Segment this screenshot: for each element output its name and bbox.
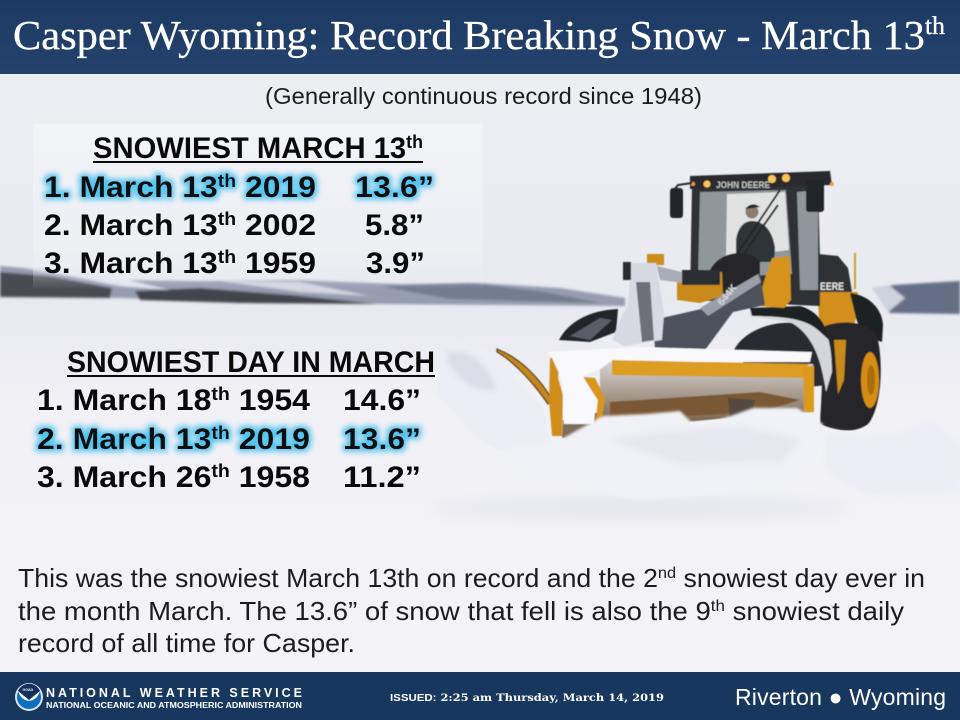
row 1 highlighted [44, 171, 434, 204]
summary paragraph: snowiest daily [725, 596, 904, 626]
summary paragraph: nd [658, 565, 676, 582]
lift arm [653, 273, 765, 350]
office location: Riverton ● Wyoming [735, 684, 946, 710]
row 1 highlighted: 13.6” [355, 171, 434, 204]
summary paragraph: snowiest day ever in [676, 563, 925, 593]
tilt linkage [612, 262, 720, 346]
orange warning lamp [647, 254, 664, 265]
photo: wheel loader with snow plow [438, 171, 960, 500]
snow pile pushed by blade [500, 408, 960, 500]
agency name: NATIONAL OCEANIC AND ATMOSPHERIC ADMINISTRATION [46, 701, 302, 710]
front tire [733, 323, 830, 390]
row 2 highlighted: 2. March 13 [37, 423, 198, 456]
row 3: 3.9” [366, 247, 425, 280]
icon: NOAA logo [15, 683, 43, 711]
cab: glass [698, 190, 792, 278]
heading: th [406, 132, 423, 152]
row 3: 11.2” [343, 461, 421, 494]
rear tire and rim [820, 323, 881, 430]
orange body pieces [757, 256, 791, 308]
snow heap left of blade [438, 343, 590, 470]
subtitle: (Generally continuous record since 1948) [265, 83, 702, 109]
row 3: 3. March 13 [44, 247, 205, 280]
engine body [817, 292, 858, 340]
row 3: 3. March 26 [37, 461, 198, 494]
row 2 highlighted: th [211, 423, 230, 443]
row 2: 2002 [236, 209, 316, 242]
row 2 [44, 209, 424, 242]
agency name: NATIONAL WEATHER SERVICE [46, 686, 302, 700]
row 2 highlighted: 2019 [230, 423, 310, 456]
cab: driver [736, 204, 775, 262]
panel: snowiest day in March [37, 346, 435, 494]
cab: roof with lights [690, 171, 834, 190]
snow on top of blade [548, 347, 812, 424]
lift arm: 644K [716, 282, 740, 308]
row 1: 14.6” [343, 384, 421, 417]
row 1: th [211, 384, 230, 404]
row 1 highlighted: 2019 [236, 171, 316, 204]
snow shadows [430, 445, 960, 514]
summary paragraph: th [711, 598, 725, 615]
row 3: th [211, 461, 230, 481]
panel: snowiest March 13th [33, 124, 483, 290]
decal: DEERE: EERE [820, 281, 844, 293]
hood [818, 254, 852, 294]
summary paragraph: This was the snowiest March 13th on record and the 2 [18, 563, 642, 593]
row 2: th [218, 209, 236, 229]
row 2: 5.8” [365, 209, 424, 242]
row 2: 2. March 13 [44, 209, 205, 242]
front fender [750, 306, 832, 392]
agency name [46, 686, 302, 710]
heap shading [445, 351, 496, 390]
row 1 highlighted: th [218, 171, 236, 191]
title: th [925, 13, 946, 40]
blade [549, 358, 814, 438]
distant mountains right [872, 281, 960, 314]
row 3 [44, 247, 425, 280]
header bar [0, 0, 960, 74]
row 3 [37, 461, 421, 494]
snowy tread on far tire [570, 318, 612, 340]
distant mountains left [0, 266, 625, 306]
row 2 highlighted [37, 423, 421, 456]
issued time: ISSUED: 2:25 am Thursday, March 14, 2019 [390, 693, 664, 704]
heading: SNOWIEST MARCH 13 [93, 132, 409, 165]
row 3: 1958 [230, 461, 310, 494]
footer bar [0, 672, 960, 720]
cab: steering wheel and wipers [710, 253, 760, 290]
cab: roof with lights: JOHN DEERE [716, 180, 770, 190]
summary paragraph: record of all time for Casper. [18, 628, 355, 658]
rear fender [850, 293, 883, 342]
cab: mirrors [670, 180, 824, 218]
heading: SNOWIEST DAY IN MARCH [67, 346, 435, 379]
far tire behind arms [559, 309, 618, 342]
cab: frame [690, 180, 820, 306]
row 3: th [218, 247, 236, 267]
title: Casper Wyoming: Record Breaking Snow - March 13 [13, 12, 895, 58]
row 2 highlighted: 13.6” [343, 423, 421, 456]
row 3: 1959 [236, 247, 316, 280]
row 1: 1954 [230, 384, 311, 417]
summary paragraph: the month March. The 13.6” of snow that fell is also the 9 [18, 596, 672, 626]
summary paragraph [18, 563, 925, 658]
blade wing left [497, 349, 552, 404]
icon: NOAA logo: noaa [22, 687, 34, 692]
row 1 [37, 384, 421, 417]
row 1: 1. March 18 [37, 384, 198, 417]
row 1 highlighted: 1. March 13 [44, 171, 205, 204]
